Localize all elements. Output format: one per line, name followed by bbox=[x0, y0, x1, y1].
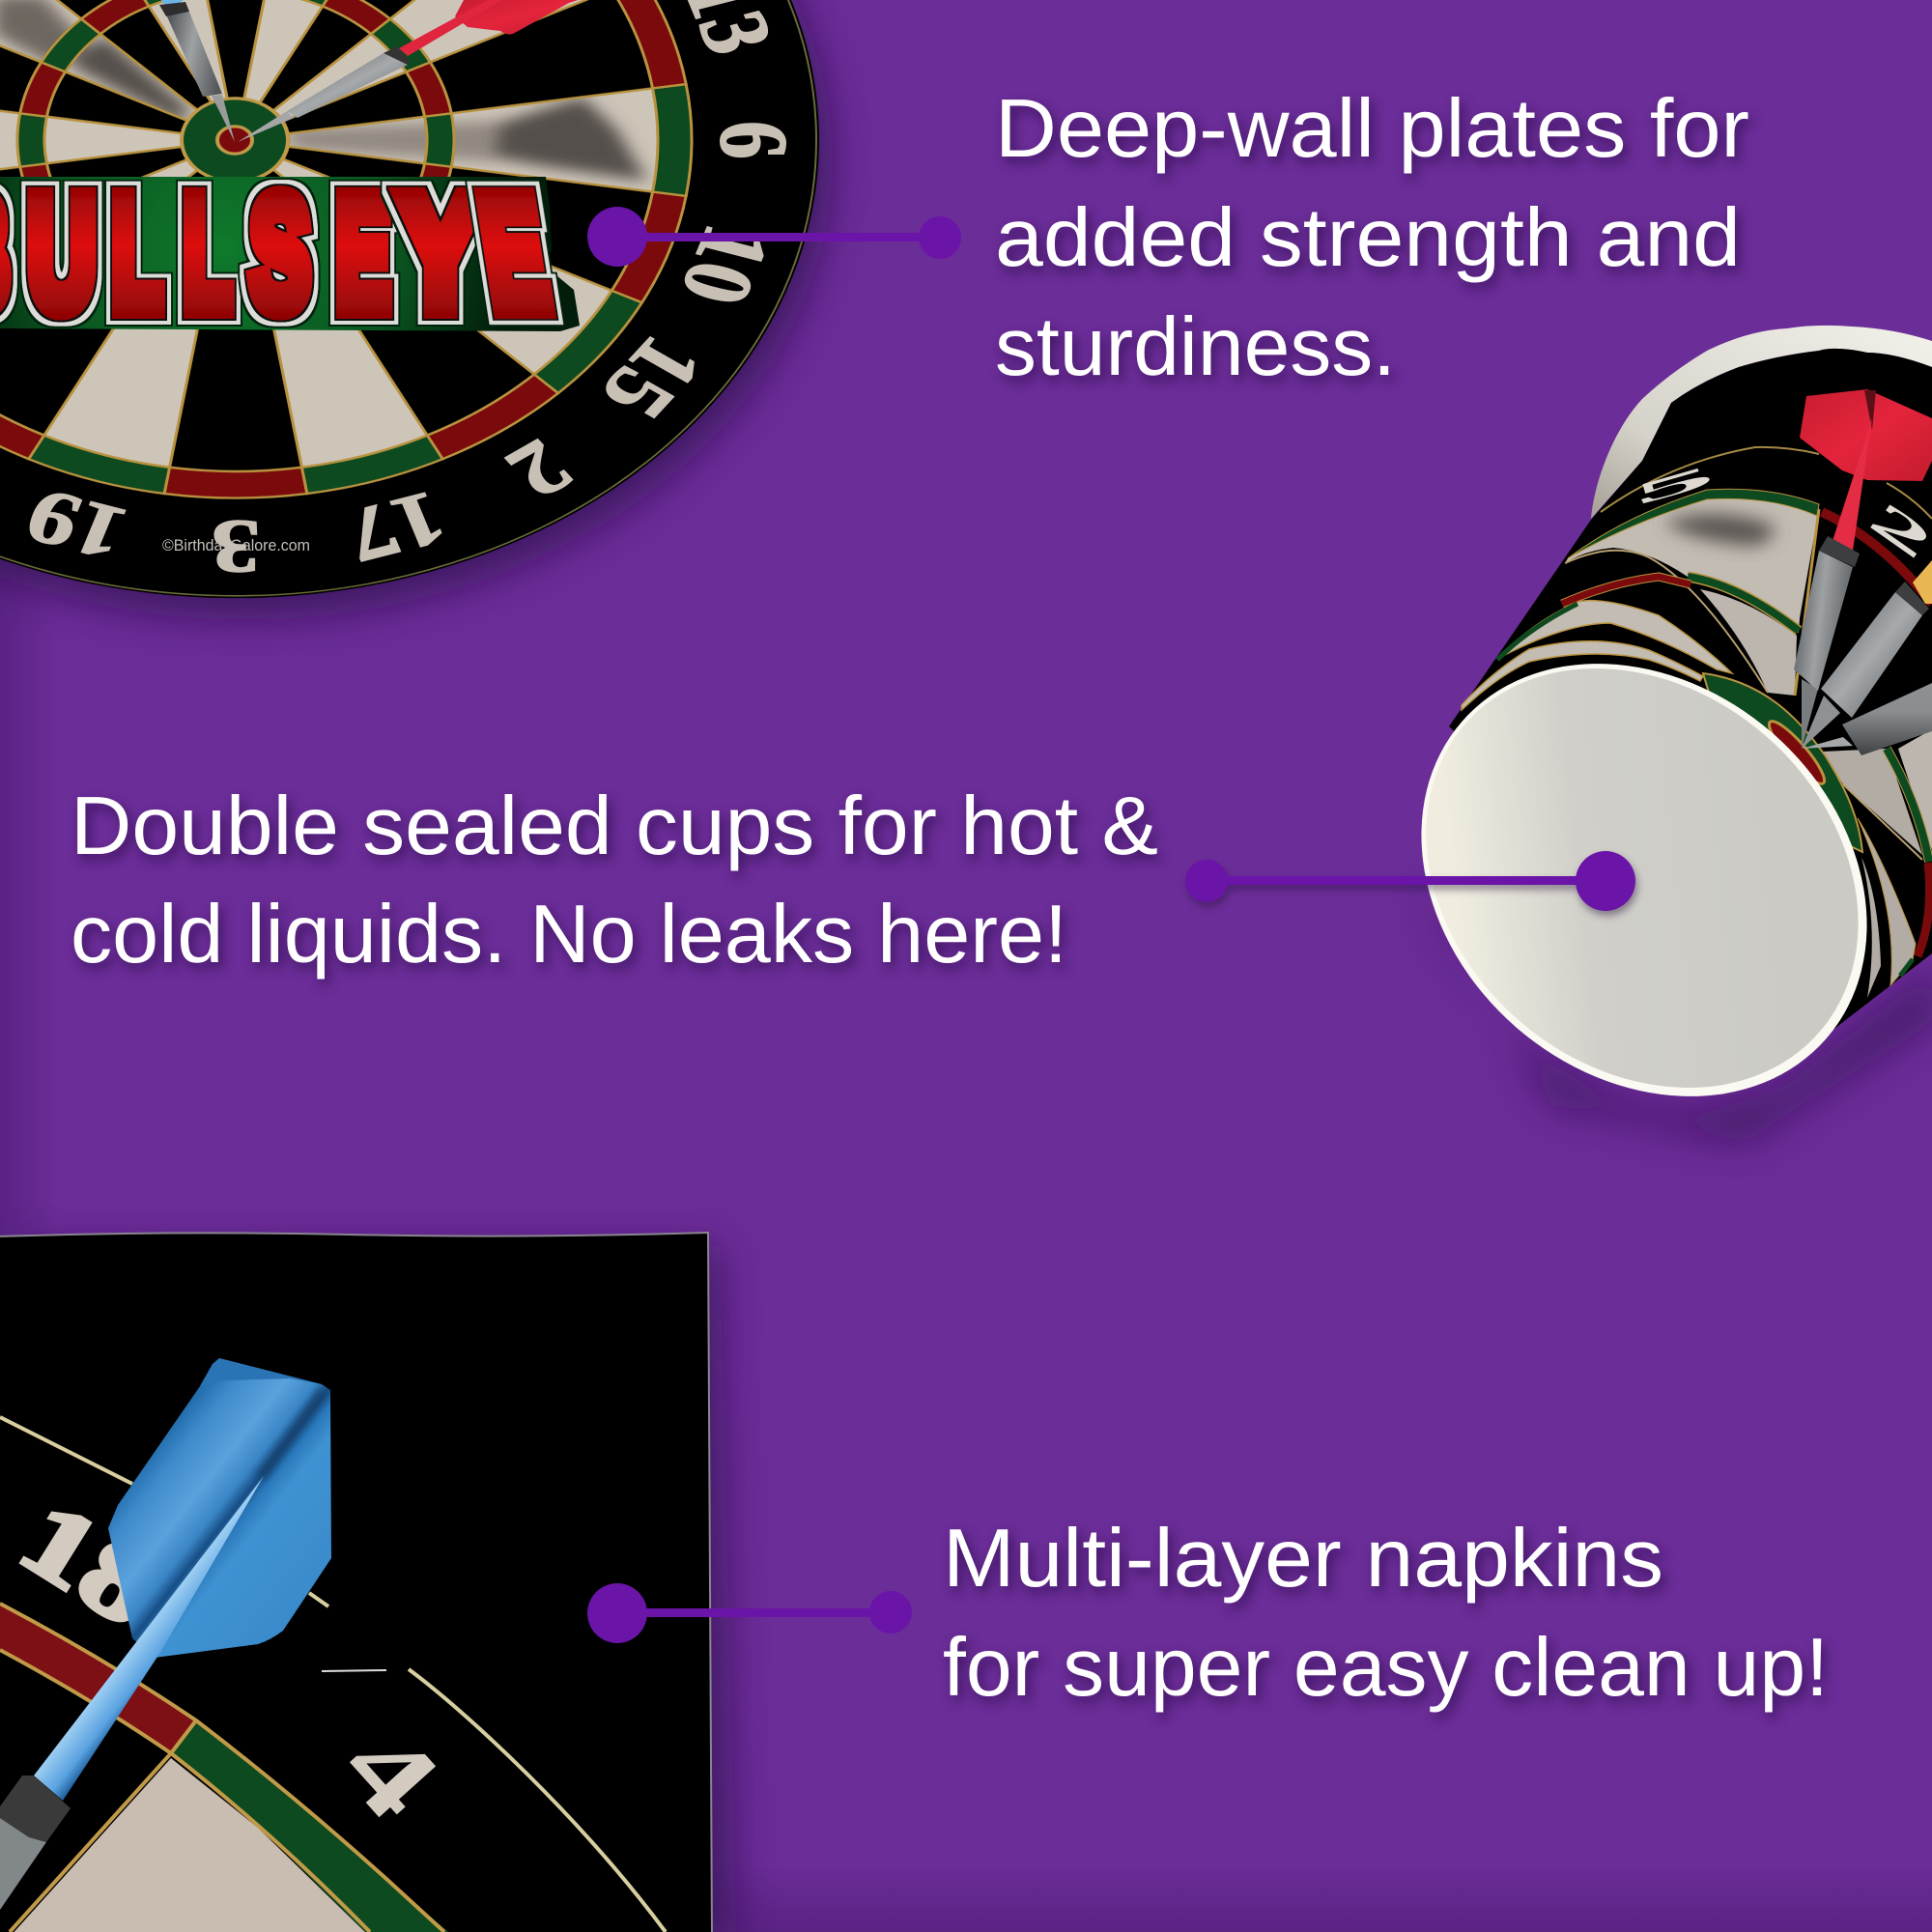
napkin dart bbox=[0, 1358, 331, 1910]
dartboard plate: 6 bbox=[700, 121, 807, 159]
cup body: 5 bbox=[1629, 458, 1719, 512]
cup bbox=[1334, 326, 1932, 1185]
text: plates: added strength and bbox=[995, 192, 1741, 284]
dartboard plate bbox=[0, 0, 832, 619]
BULLSEYE logo bbox=[0, 164, 580, 343]
board dart: red bbox=[238, 0, 578, 142]
text: plates: sturdiness. bbox=[995, 301, 1396, 393]
napkin number 18: 18 bbox=[1, 1479, 178, 1649]
connector: napkin callout bbox=[587, 1583, 912, 1643]
BULLSEYE logo: S bbox=[250, 164, 310, 343]
dartboard plate: 15 bbox=[581, 323, 724, 433]
text: cups: cold liquids. No leaks here! bbox=[71, 889, 1067, 980]
BULLSEYE logo: Y bbox=[400, 164, 481, 343]
dartboard plate: 2 bbox=[489, 424, 591, 514]
dartboard plate: 17 bbox=[333, 475, 458, 578]
BULLSEYE logo: E bbox=[336, 164, 390, 343]
dartboard plate: 3 bbox=[212, 504, 260, 588]
napkin number 4: 4 bbox=[318, 1702, 464, 1844]
text: napkins: for super easy clean up! bbox=[943, 1622, 1829, 1714]
BULLSEYE logo: L bbox=[184, 164, 232, 343]
cup base bbox=[1334, 575, 1932, 1185]
cup darts bbox=[1794, 389, 1932, 755]
text: plates bbox=[995, 83, 1749, 393]
BULLSEYE logo: U bbox=[28, 164, 96, 343]
copyright text: ©BirthdayGalore.com bbox=[162, 536, 310, 554]
text: plates: Deep-wall plates for bbox=[995, 83, 1749, 175]
text: napkins: Multi-layer napkins bbox=[943, 1513, 1663, 1605]
dartboard plate: 10 bbox=[660, 216, 791, 314]
text: napkins bbox=[943, 1513, 1829, 1714]
text: cups bbox=[71, 781, 1158, 980]
napkin bbox=[0, 1233, 736, 1932]
dartboard plate: 19 bbox=[14, 473, 139, 576]
BULLSEYE logo: E bbox=[469, 164, 558, 343]
cup body bbox=[1449, 326, 1932, 1058]
connector: plate callout bbox=[587, 207, 961, 267]
connector: cup callout bbox=[1185, 851, 1635, 911]
BULLSEYE logo: L bbox=[112, 164, 162, 343]
text: cups: Double sealed cups for hot & bbox=[71, 781, 1158, 872]
board dart: left bbox=[159, 0, 235, 142]
